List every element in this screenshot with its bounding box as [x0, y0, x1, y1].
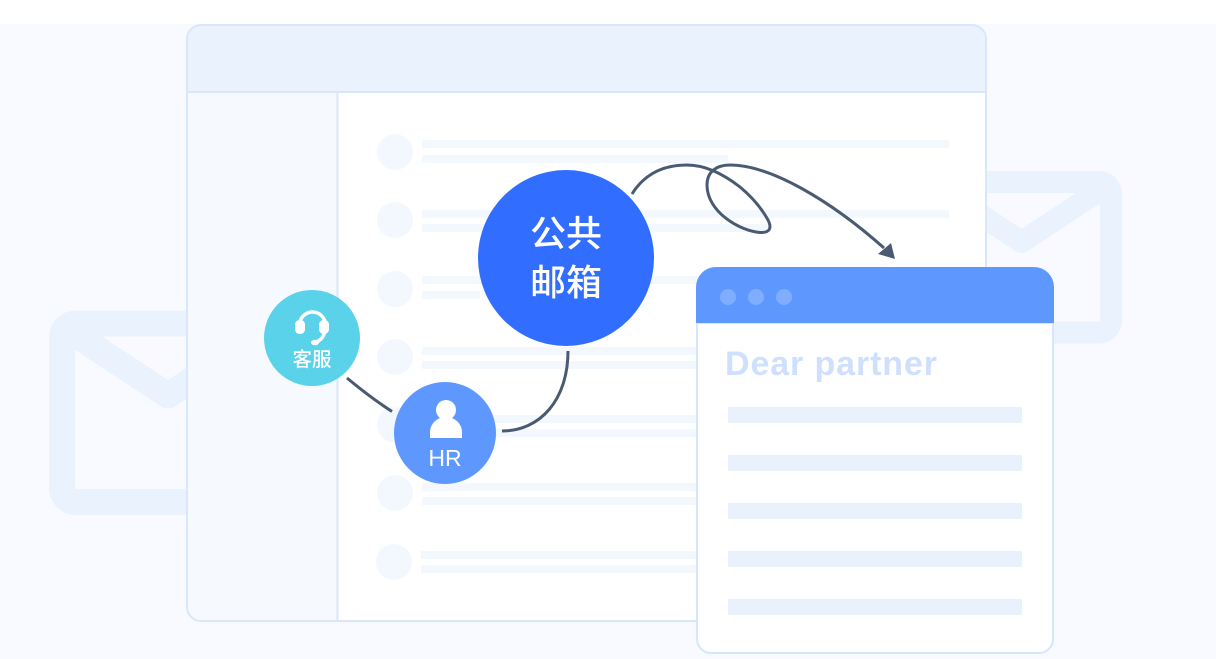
label: public mailbox: 邮箱 — [530, 262, 602, 303]
arrow: customer service to HR — [347, 378, 392, 412]
node: customer service — [264, 290, 360, 386]
arrow: HR to public mailbox — [502, 351, 568, 431]
panel: email window — [696, 267, 1054, 653]
icon: right background envelope — [931, 182, 1111, 332]
icon: person — [430, 400, 462, 438]
icon: left background envelope — [62, 324, 274, 502]
message list — [376, 134, 949, 580]
label: public mailbox: 公共 — [530, 213, 602, 254]
window outline and dividers — [187, 25, 986, 621]
window body — [187, 25, 986, 621]
window control dots — [720, 289, 792, 305]
arrow: looping path from public mailbox to email — [632, 165, 895, 259]
label: HR: HR — [428, 445, 462, 471]
email text lines — [728, 407, 1022, 615]
window sidebar — [187, 92, 338, 621]
panel: main mailbox window — [187, 25, 986, 621]
node: public mailbox — [478, 170, 654, 346]
email body — [697, 323, 1053, 653]
label: public mailbox — [530, 213, 602, 303]
node: HR — [394, 382, 496, 484]
email greeting: Dear partner — [725, 345, 937, 383]
label: customer service: 客服 — [292, 349, 332, 371]
icon: headset — [295, 312, 329, 345]
window header — [187, 25, 986, 92]
email header — [696, 267, 1054, 323]
